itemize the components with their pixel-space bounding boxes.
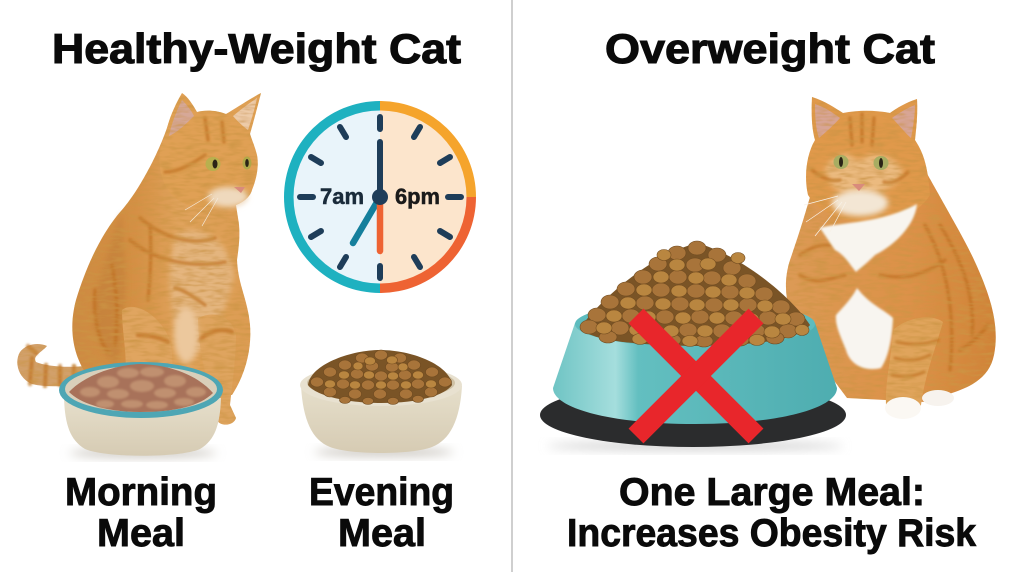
tail stripes xyxy=(28,346,74,386)
heading: overweight cat: Overweight Cat xyxy=(605,25,935,72)
left eye xyxy=(206,157,220,171)
bowl inner xyxy=(65,366,217,412)
right ear inner xyxy=(892,105,915,138)
whiskers xyxy=(185,194,218,226)
bowl shadow xyxy=(547,442,843,450)
6pm label: 6pm xyxy=(395,184,440,209)
label: one large meal warning: One Large Meal: xyxy=(619,471,925,514)
bowl shadow xyxy=(314,448,454,456)
muzzle xyxy=(832,190,888,216)
bowl rim xyxy=(300,364,462,406)
kibble pieces light xyxy=(324,356,436,389)
evening bowl: dry kibble xyxy=(300,350,462,456)
7am hand xyxy=(353,197,380,243)
left foreleg xyxy=(122,307,172,385)
kibble dark pieces xyxy=(580,241,805,347)
clock face: evening half xyxy=(380,106,471,288)
white belly xyxy=(836,288,893,369)
whiskers xyxy=(804,196,846,236)
label: one large meal warning xyxy=(567,471,976,555)
bowl body xyxy=(301,386,462,453)
right foreleg xyxy=(198,315,236,425)
label: evening meal: Evening xyxy=(309,471,454,514)
label: evening meal xyxy=(309,471,454,555)
illustration: overweight cat xyxy=(786,97,996,419)
label: one large meal warning: Increases Obesity Risk xyxy=(567,512,976,555)
nose xyxy=(852,184,865,191)
head xyxy=(159,93,261,209)
head xyxy=(806,97,930,224)
clock ring: red-orange arc xyxy=(380,197,476,293)
right eye xyxy=(874,156,888,170)
bowl shadow xyxy=(69,449,217,457)
clock ring: teal arc xyxy=(284,101,380,293)
morning bowl: wet food xyxy=(59,362,223,457)
heading: healthy-weight cat: Healthy-Weight Cat xyxy=(52,25,461,72)
clock centre xyxy=(372,189,388,205)
white chest xyxy=(820,204,917,272)
coat and markings xyxy=(786,97,996,402)
cross stroke ascending xyxy=(636,316,756,436)
kibble pieces xyxy=(310,350,452,404)
wet food chunks xyxy=(80,367,206,409)
nose xyxy=(234,187,245,193)
bowl rim xyxy=(59,362,223,418)
6pm hand xyxy=(377,197,383,251)
back paw xyxy=(922,390,954,406)
illustration: healthy-weight cat xyxy=(17,93,261,425)
right ear inner xyxy=(233,98,257,130)
clock face: morning half xyxy=(289,106,380,288)
label: morning meal: Morning xyxy=(65,471,217,514)
teal bowl body xyxy=(553,323,837,424)
haunch shadow xyxy=(94,212,126,365)
black base xyxy=(540,383,846,447)
left ear inner xyxy=(815,104,840,138)
fur stripes xyxy=(95,118,225,352)
hour ticks xyxy=(300,117,461,278)
large bowl with heap of kibble xyxy=(540,241,846,450)
bowl body xyxy=(64,398,221,456)
foreleg xyxy=(886,317,943,415)
fur stripes xyxy=(800,114,988,370)
face highlight xyxy=(825,154,903,195)
clock ring: orange arc xyxy=(380,101,476,197)
bowl rim xyxy=(575,301,815,347)
coat and markings xyxy=(17,93,261,425)
divider xyxy=(511,0,513,572)
kibble light pieces xyxy=(596,250,809,346)
red cross mark xyxy=(636,316,756,436)
right eye xyxy=(242,156,252,170)
label: morning meal: Meal xyxy=(97,512,185,555)
label: morning meal xyxy=(65,471,217,555)
7am label: 7am xyxy=(320,184,364,209)
body xyxy=(72,125,250,395)
body xyxy=(786,170,996,402)
leg stripes xyxy=(138,330,232,342)
minute hand at twelve xyxy=(377,142,383,197)
cross stroke descending xyxy=(636,316,756,436)
bowl inner xyxy=(307,366,455,400)
left eye xyxy=(834,155,848,169)
clock xyxy=(284,101,476,293)
front paw xyxy=(885,397,921,419)
wet food xyxy=(69,364,213,412)
muzzle xyxy=(208,187,248,207)
kibble base xyxy=(308,350,452,403)
chest highlight xyxy=(170,231,234,360)
left ear inner xyxy=(169,100,194,136)
belly highlight xyxy=(174,307,198,363)
tail xyxy=(17,344,90,386)
kibble mound xyxy=(580,243,810,346)
label: evening meal: Meal xyxy=(338,512,426,555)
